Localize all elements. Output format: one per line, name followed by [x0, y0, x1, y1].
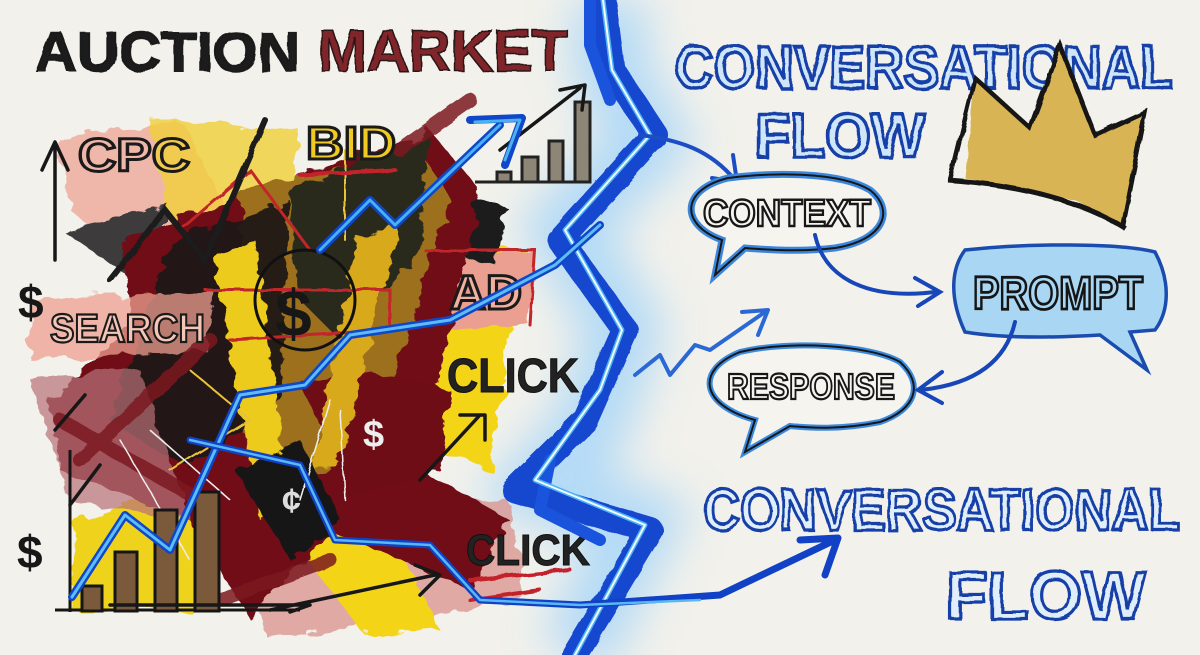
arrow: prompt to response — [918, 322, 1015, 403]
label: CLICK upper: CLICK — [447, 350, 579, 403]
left heading: Auction Market — [35, 19, 568, 84]
right heading: Conversational Flow: FLOW — [755, 102, 925, 171]
lower heading: Conversational Flow: FLOW — [946, 558, 1147, 634]
left heading: Auction Market: AUCTION — [35, 20, 300, 83]
blue arrow rising to the top — [72, 118, 838, 605]
speech bubble: Response — [710, 345, 914, 452]
label: SEARCH: SEARCH — [50, 307, 205, 351]
dollar signs — [17, 276, 384, 578]
panel: auction market chaos painting — [30, 100, 570, 640]
bar chart: top right of auction panel — [475, 102, 590, 182]
speech bubble: Response: RESPONSE — [727, 366, 895, 407]
right heading: Conversational Flow — [675, 34, 1173, 171]
speech bubble: Context: CONTEXT — [703, 193, 871, 235]
arrows: black trend arrows — [42, 85, 585, 612]
label: CLICK lower: CLICK — [466, 526, 590, 575]
lightning crack — [515, 0, 655, 655]
speech bubble: Prompt: PROMPT — [973, 267, 1143, 319]
bar chart: bottom left — [55, 450, 300, 612]
speech bubble: Prompt — [954, 245, 1166, 370]
label: BID: BID — [306, 117, 396, 169]
cent symbol: ¢ — [282, 482, 301, 520]
dollar signs: $ — [275, 276, 312, 350]
icon: gold crown — [948, 45, 1145, 228]
dollar circle — [255, 250, 355, 350]
arrow: context to prompt — [815, 235, 940, 306]
label: AD: AD — [450, 267, 522, 320]
speech bubble: Context — [691, 174, 883, 275]
left heading: Auction Market: MARKET — [318, 19, 568, 84]
red and dark brush strokes — [60, 100, 570, 600]
dollar signs: $ — [18, 276, 44, 328]
label: CPC: CPC — [78, 129, 190, 181]
dollar signs: $ — [363, 414, 384, 456]
dollar signs: $ — [17, 526, 43, 578]
lightning glow — [540, 0, 650, 655]
lower heading: Conversational Flow — [703, 478, 1180, 634]
